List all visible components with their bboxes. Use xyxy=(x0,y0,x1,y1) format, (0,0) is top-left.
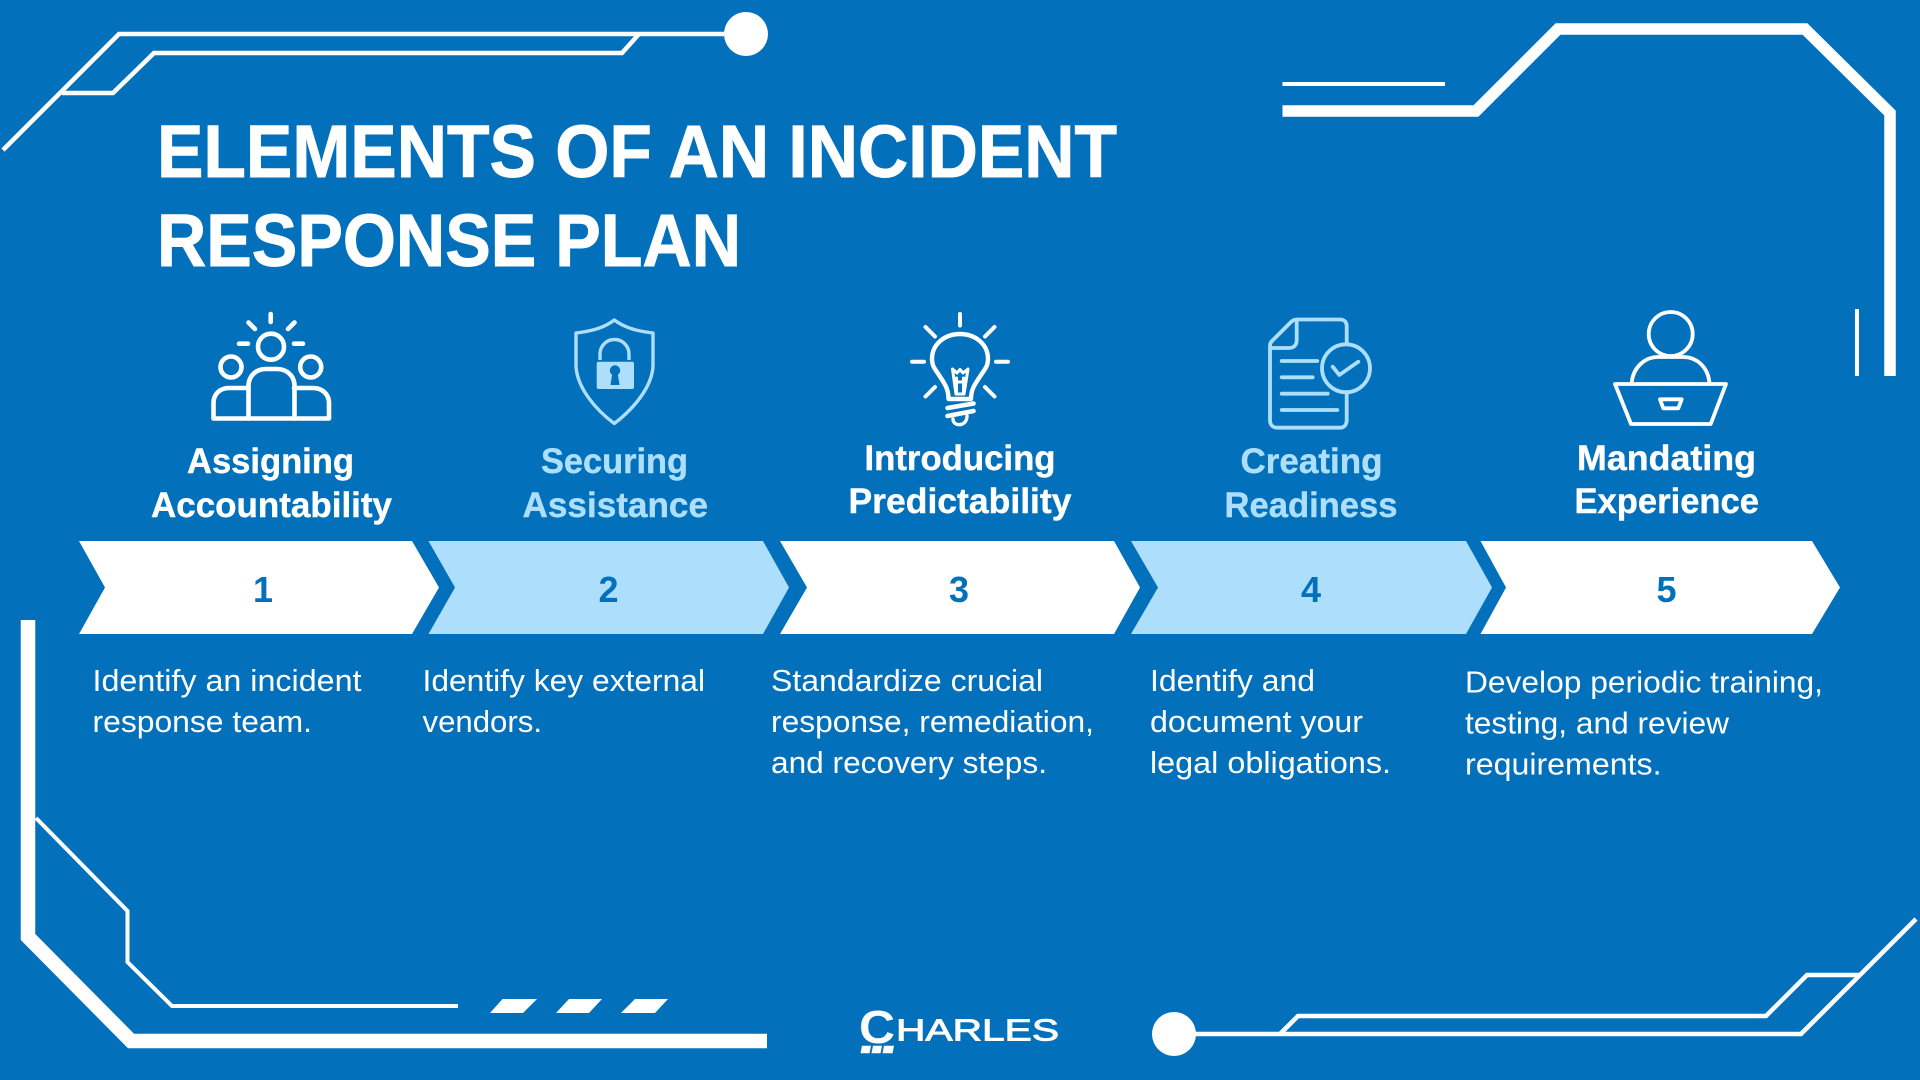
heading xyxy=(522,442,708,525)
heading: Predictability xyxy=(848,482,1072,521)
heading: Experience xyxy=(1574,482,1759,521)
chevron 3 xyxy=(780,541,1140,634)
logo: Charles xyxy=(859,1001,1059,1053)
step 3: Introducing Predictability xyxy=(848,314,1072,521)
step 5: Mandating Experience xyxy=(1574,312,1759,521)
chevron 1: 1 xyxy=(253,569,273,610)
heading xyxy=(1574,439,1759,521)
icon: team of people xyxy=(214,314,329,418)
circuit decoration: top right xyxy=(1282,29,1890,376)
description 2 xyxy=(422,663,705,739)
step 2: Securing Assistance xyxy=(522,320,708,525)
description 5: Develop periodic training, xyxy=(1465,664,1823,700)
chevron process bar xyxy=(79,541,1840,634)
heading: Creating xyxy=(1240,442,1382,481)
heading: Introducing xyxy=(864,439,1056,478)
circuit decoration: bottom left xyxy=(28,620,767,1041)
description 3: and recovery steps. xyxy=(771,745,1047,780)
icon: document with check xyxy=(1270,320,1370,428)
description 5: requirements. xyxy=(1465,746,1662,782)
description 4: document your xyxy=(1150,704,1363,739)
heading: Mandating xyxy=(1577,439,1756,478)
title: ELEMENTS OF AN INCIDENT xyxy=(157,110,1117,193)
description 4: legal obligations. xyxy=(1150,745,1391,780)
description 1: Identify an incident xyxy=(92,663,362,698)
description 3: response, remediation, xyxy=(771,704,1094,739)
heading xyxy=(1224,442,1398,525)
title: RESPONSE PLAN xyxy=(157,199,741,282)
heading xyxy=(848,439,1072,521)
description 4 xyxy=(1150,663,1391,780)
heading: Assistance xyxy=(522,486,708,525)
icon: light bulb xyxy=(912,314,1008,425)
step 1: Assigning Accountability xyxy=(151,314,393,525)
icon: shield with padlock xyxy=(576,320,653,424)
circuit decoration: top left xyxy=(3,12,768,150)
description 5 xyxy=(1465,664,1823,782)
heading: Readiness xyxy=(1224,486,1398,525)
description 3: Standardize crucial xyxy=(771,663,1043,698)
chevron 2 xyxy=(428,541,789,634)
description 1 xyxy=(92,663,362,739)
heading xyxy=(151,442,393,525)
description 1: response team. xyxy=(92,704,312,739)
chevron 4 xyxy=(1131,541,1492,634)
chevron 5: 5 xyxy=(1656,569,1677,610)
heading: Accountability xyxy=(151,486,393,525)
heading: Assigning xyxy=(187,442,354,481)
step 4: Creating Readiness xyxy=(1224,320,1398,525)
circuit decoration: bottom right xyxy=(1152,919,1916,1056)
description 2: Identify key external xyxy=(422,663,705,698)
chevron 2: 2 xyxy=(598,569,619,610)
description 5: testing, and review xyxy=(1465,706,1730,740)
chevron 1 xyxy=(79,541,439,634)
chevron 3: 3 xyxy=(949,569,969,610)
icon: person at laptop xyxy=(1615,312,1726,424)
heading: Securing xyxy=(541,442,688,481)
description 4: Identify and xyxy=(1150,663,1315,698)
chevron 4: 4 xyxy=(1301,569,1321,610)
description 2: vendors. xyxy=(422,704,542,739)
logo: Charles: C xyxy=(859,1001,895,1053)
logo: Charles: HARLES xyxy=(896,1013,1059,1048)
title xyxy=(157,110,1117,282)
chevron 5 xyxy=(1480,541,1840,634)
description 3 xyxy=(771,663,1094,780)
